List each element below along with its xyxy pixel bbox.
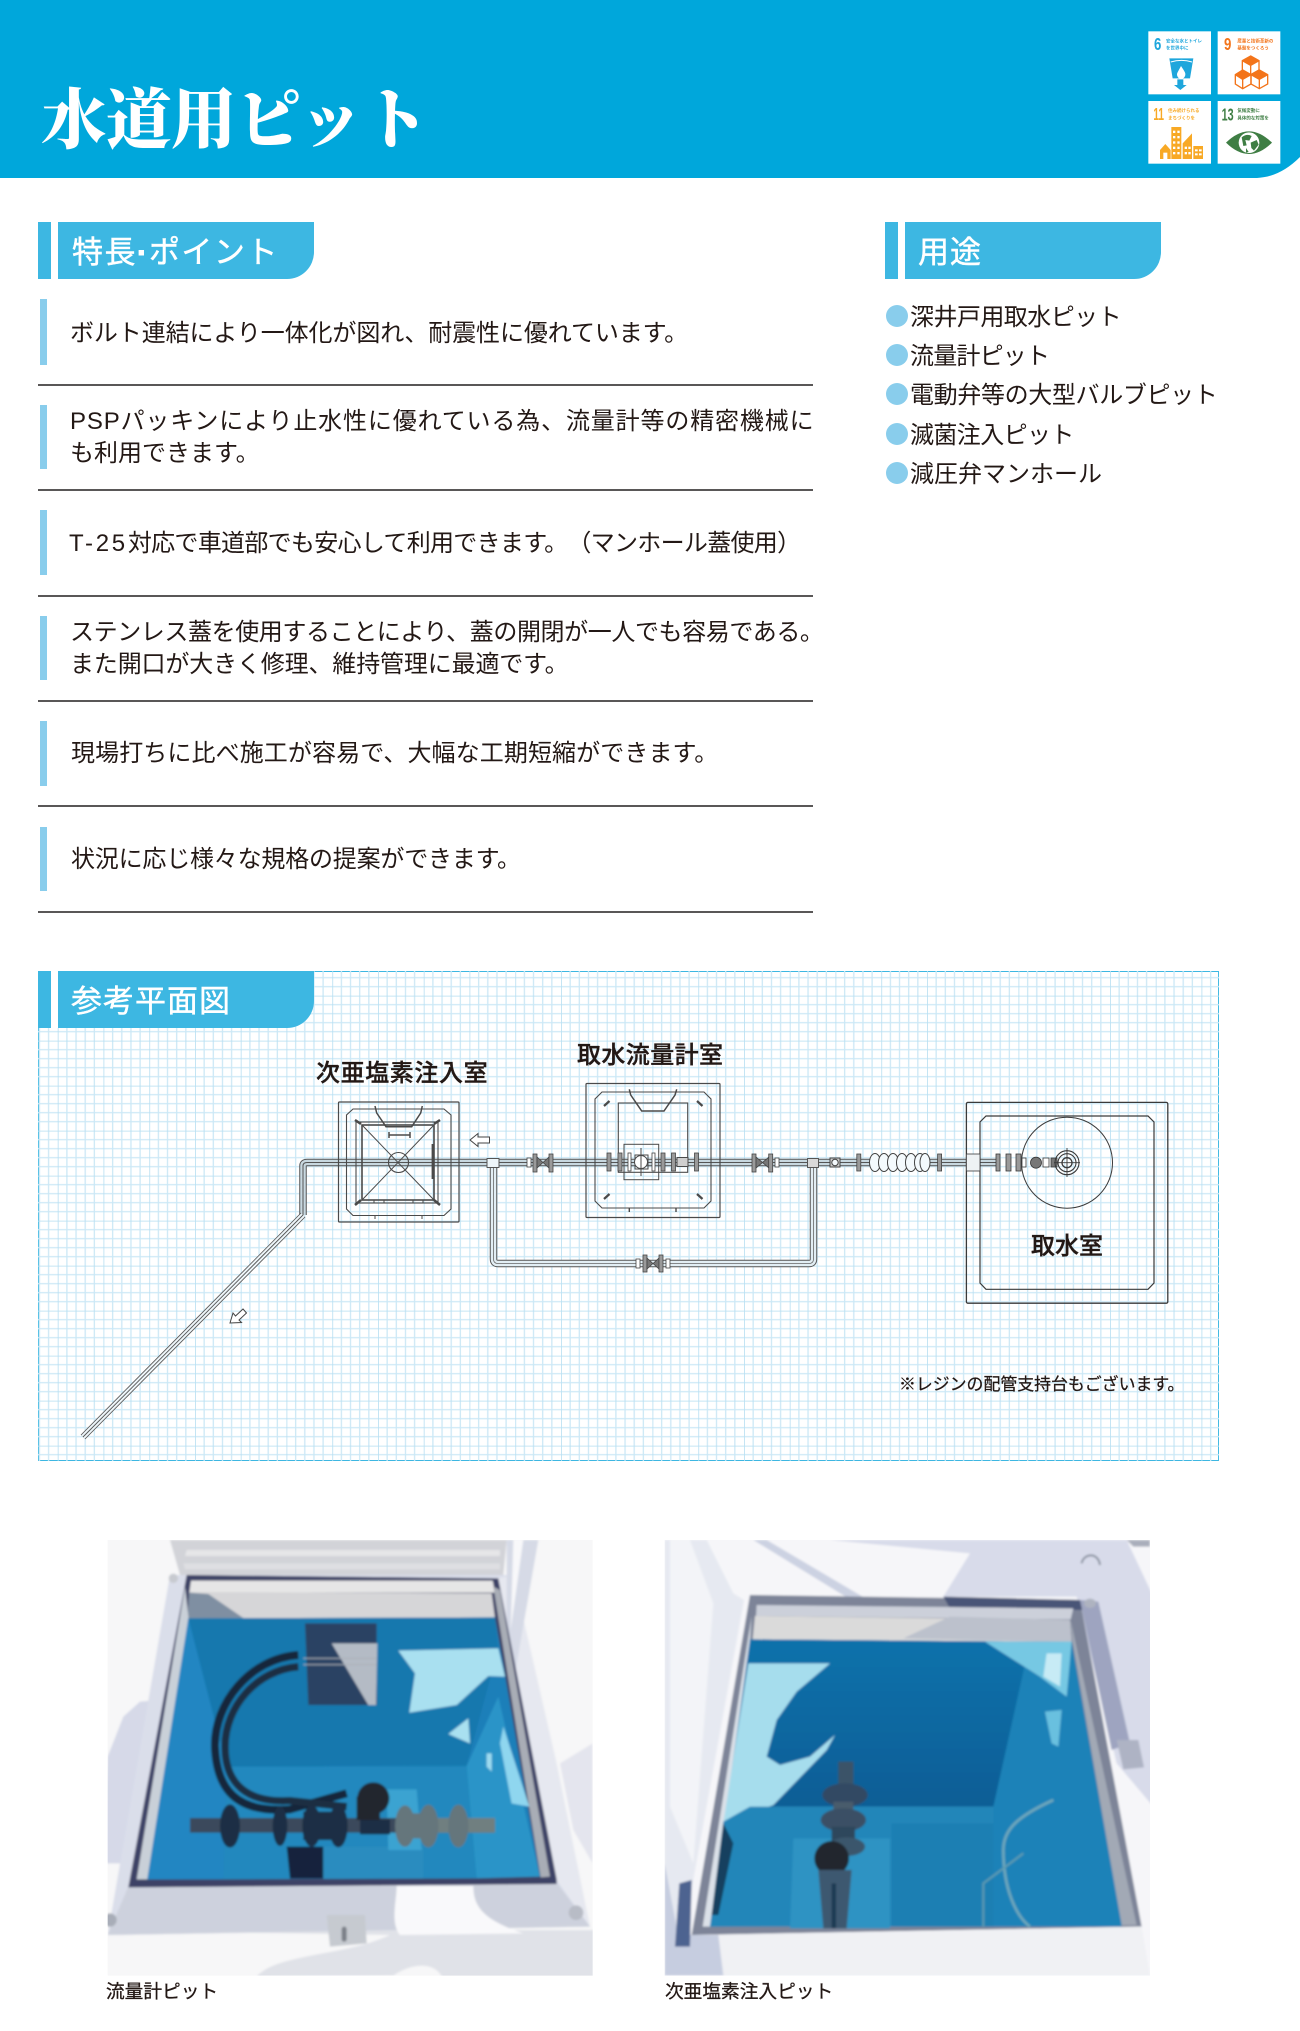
feature 2: PSPパッキンにより止水性に優れている為、流量計等の精密機械に [70,408,814,435]
icon: SDG 13: 13 [1222,105,1234,125]
use list: 電動弁等の大型バルブピット [910,382,1217,408]
icon: SDG 9: 基盤をつくろう [1237,44,1269,51]
icon: SDG 11: 11 [1153,104,1164,124]
panel: uses [885,222,1217,488]
heading: reference plan [38,971,314,1028]
heading: uses: 用途 [918,234,982,270]
use list: 減圧弁マンホール [910,460,1102,488]
feature 6: 状況に応じ様々な規格の提案ができます。 [71,846,521,873]
icon: SDG 11: まちづくりを [1168,114,1195,121]
feature 6 [38,827,813,913]
feature 3: T-25対応で車道部でも安心して利用できます。（マンホール蓋使用） [69,530,800,557]
SDG icons [1148,31,1280,164]
panel: features [38,222,824,913]
icon: SDG 9: 9 [1224,34,1231,54]
icon: SDG 6: 6 [1154,34,1162,54]
use list: 流量計ピット [910,342,1049,370]
feature 2: も利用できます。 [70,440,260,467]
room: water intake [966,1102,1168,1303]
caption: flow meter pit: 流量計ピット [106,1981,218,2002]
icon: SDG 9: 産業と技術革新の [1237,37,1274,44]
feature 2 [38,405,814,491]
feature 5: 現場打ちに比べ施工が容易で、大幅な工期短縮ができます。 [71,740,718,767]
icon: SDG 13: 具体的な対策を [1237,114,1269,121]
feature 5 [38,721,813,807]
photo: flow meter pit [108,1540,593,1976]
use list: 滅菌注入ピット [910,422,1074,448]
use list [886,304,1217,488]
arrow: flow down-left [230,1309,246,1323]
photo: hypochlorite injection pit [664,1540,1150,1976]
icon: SDG 13 [1218,101,1280,164]
arrow: flow left [470,1134,490,1146]
feature 1: ボルト連結により一体化が図れ、耐震性に優れています。 [70,320,688,347]
panel: reference plan [38,971,1219,1461]
feature 1 [38,299,813,386]
room: hypochlorite injection [338,1102,459,1222]
heading: reference plan: 参考平面図 [71,984,231,1018]
icon: SDG 6: を世界中に [1166,44,1189,51]
heading: uses [885,222,1161,279]
heading: features: 特長·ポイント [72,234,279,270]
feature 3 [38,510,813,597]
header band [0,0,1300,178]
icon: SDG 11: 住み続けられる [1168,107,1200,114]
label: flow meter room: 取水流量計室 [577,1042,723,1069]
caption: hypochlorite injection pit: 次亜塩素注入ピット [665,1981,833,2002]
feature 4 [38,616,824,702]
icon: SDG 6: 安全な水とトイレ [1166,37,1202,44]
label: intake room: 取水室 [1031,1233,1103,1260]
label: hypochlorite room: 次亜塩素注入室 [316,1060,488,1087]
valves and flanges on main line [527,1153,942,1272]
feature 4: ステンレス蓋を使用することにより、蓋の開閉が一人でも容易である。 [70,619,824,646]
room: intake flow meter [586,1084,720,1218]
diagram: pipework [83,1158,1000,1437]
title: 水道用ピット [41,85,428,158]
icon: SDG 13: 気候変動に [1237,107,1260,114]
feature 4: また開口が大きく修理、維持管理に最適です。 [70,651,568,678]
icon: SDG 9 [1218,31,1280,94]
icon: SDG 6 [1148,31,1211,94]
bellows joint [830,1154,930,1172]
heading: features [38,222,314,279]
use list: 深井戸用取水ピット [910,304,1121,330]
icon: SDG 11 [1148,101,1211,164]
note: ※レジンの配管支持台もございます。 [899,1374,1184,1394]
plan drawing [38,971,1219,1461]
